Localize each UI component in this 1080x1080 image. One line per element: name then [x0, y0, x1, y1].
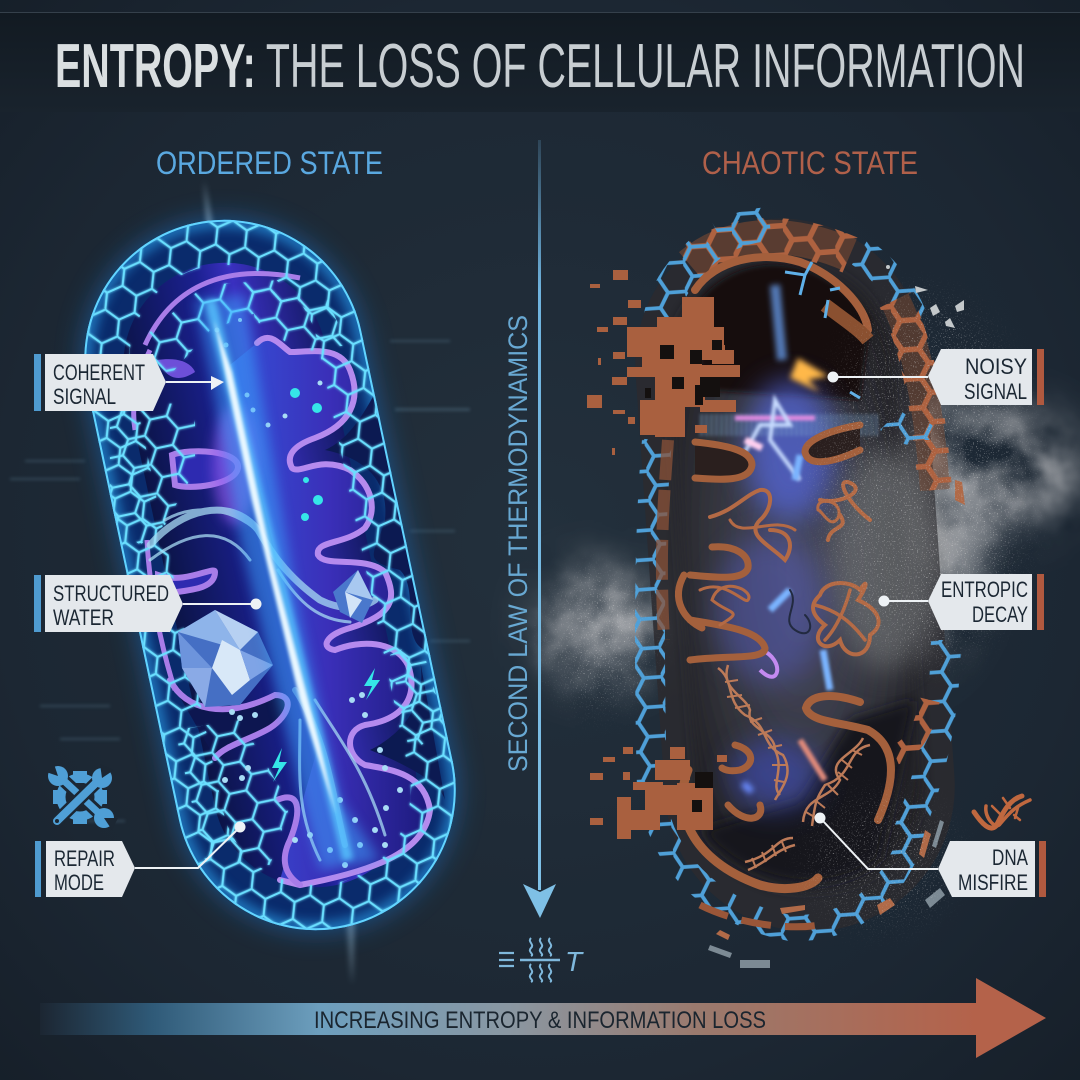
callout: dna misfire: DNA — [992, 845, 1028, 870]
heading: ordered state: ORDERED STATE — [156, 145, 383, 181]
debris — [886, 265, 964, 328]
callout: noisy signal: NOISY — [965, 354, 1027, 379]
inner cavity — [124, 262, 416, 888]
callout: structured water — [34, 575, 262, 632]
data pixel fragments — [587, 270, 740, 839]
data streak lines — [10, 340, 470, 822]
vertical label: SECOND LAW OF THERMODYNAMICS — [503, 315, 533, 772]
callout: repair mode — [35, 822, 246, 897]
callout: repair mode: REPAIR — [54, 846, 115, 871]
dust grain — [555, 300, 1025, 920]
shell underlay — [649, 232, 941, 918]
icon: heat formula — [499, 938, 584, 982]
central beam — [195, 295, 380, 870]
vertical arrow: second law of thermodynamics — [523, 140, 556, 918]
panel: chaotic mitochondrion — [540, 224, 1080, 968]
cristae pouch with membrane — [230, 338, 430, 885]
structured water streams — [150, 510, 385, 860]
callout: coherent signal: SIGNAL — [53, 384, 116, 409]
pink glow beside beam — [213, 405, 257, 525]
fold tips dark — [325, 394, 426, 650]
arrow label: INCREASING ENTROPY & INFORMATION LOSS — [314, 1007, 766, 1034]
icon: heat formula: T — [565, 946, 584, 977]
callout: structured water: WATER — [53, 605, 114, 630]
callout: repair mode: MODE — [54, 870, 104, 895]
bottom arrow: increasing entropy — [40, 978, 1046, 1058]
callout: noisy signal: SIGNAL — [964, 379, 1027, 404]
callout: entropic decay: DECAY — [972, 602, 1028, 627]
left folds — [158, 451, 300, 885]
pixel holes — [645, 340, 722, 812]
callout: entropic decay: ENTROPIC — [941, 577, 1028, 602]
callout: entropic decay — [878, 574, 1044, 630]
callout: coherent signal — [34, 354, 224, 411]
energy glows — [700, 285, 880, 810]
interior haze — [660, 255, 930, 897]
crystals — [178, 570, 373, 707]
tangled proteins — [700, 482, 879, 654]
bright shell edge — [84, 220, 456, 930]
smoke clouds — [540, 410, 1080, 680]
smoke overlay inside — [830, 450, 940, 670]
callout: dna misfire: MISFIRE — [958, 870, 1028, 895]
inner copper membrane — [695, 257, 868, 330]
icon: broken dna — [974, 796, 1030, 828]
icon: repair wrenches and gear — [46, 764, 118, 830]
callout: noisy signal — [828, 349, 1044, 405]
distorted cristae — [678, 425, 891, 889]
molecules and sparks — [272, 388, 380, 782]
title band — [0, 12, 1080, 112]
callout: dna misfire — [814, 812, 1046, 897]
heading: chaotic state: CHAOTIC STATE — [702, 145, 918, 181]
callout: coherent signal: COHERENT — [53, 360, 145, 385]
callout: structured water: STRUCTURED — [53, 581, 169, 606]
dna fragments — [718, 665, 870, 870]
shell fragments: copper and blue hexes — [650, 224, 946, 928]
dark interior top and bottom — [700, 265, 870, 400]
hex shell and clusters — [86, 220, 456, 930]
blue shard lines — [785, 262, 860, 398]
panel: ordered mitochondrion — [58, 180, 490, 985]
